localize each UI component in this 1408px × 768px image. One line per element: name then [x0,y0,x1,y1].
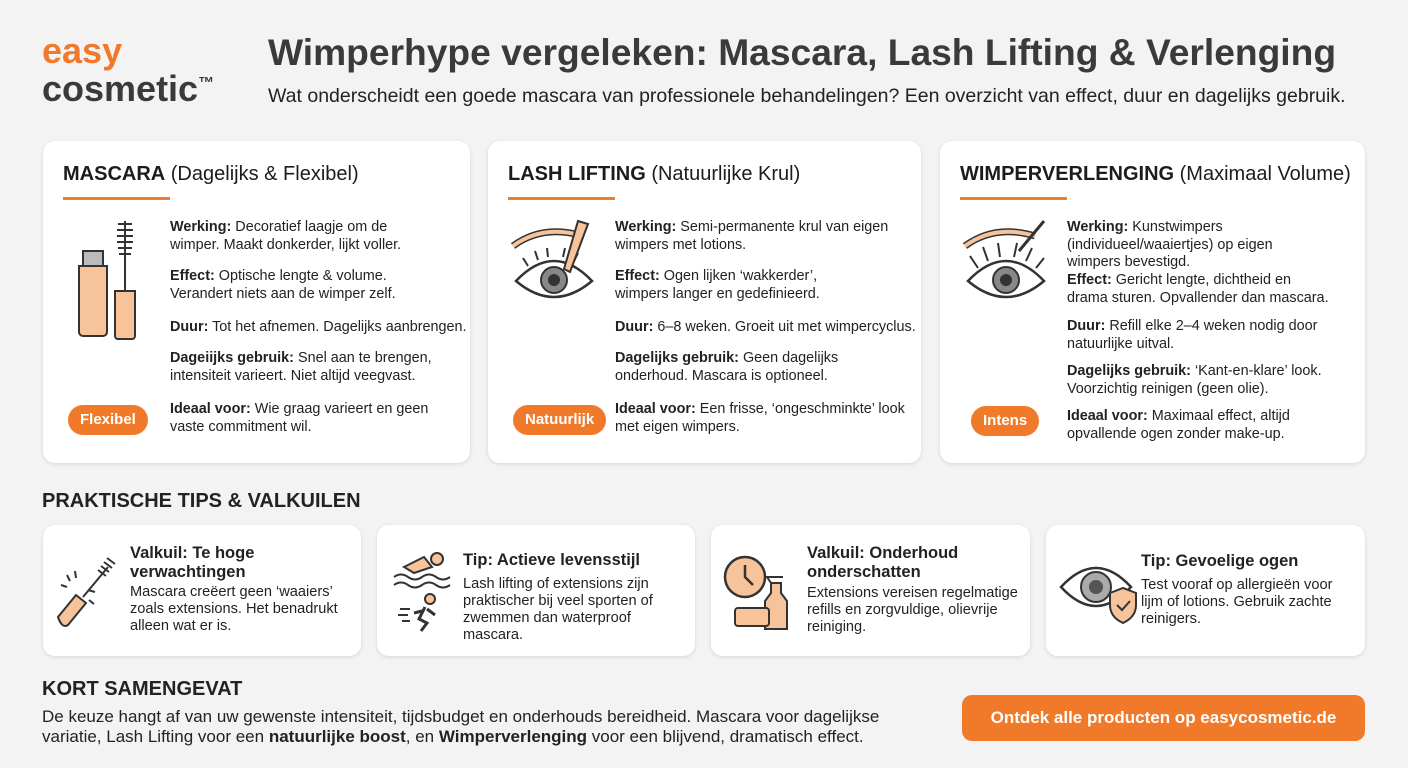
tip card 1 [43,525,361,656]
tip card 3: Extensions vereisen regelmatige [807,585,1018,601]
title: Wimperhype vergeleken: Mascara, Lash Lifting & Verlenging [268,31,1336,73]
tip card 3: onderschatten [807,563,921,581]
text: mascara details: wimper. Maakt donkerder, lijkt voller. [170,236,401,252]
text: verlenging details: Ideaal voor: Maximaal effect, altijd [1067,408,1290,424]
text: mascara details: Effect: Optische lengte & volume. [170,268,387,284]
text: verlenging details: Effect: Gericht lengte, dichtheid en [1067,272,1291,288]
text: lash lifting details: Dagelijks gebruik: Geen dagelijks [615,350,838,366]
icon: eye with shield [1059,566,1137,624]
logo [42,30,214,109]
panel: mascara: MASCARA (Dagelijks & Flexibel) [63,163,359,185]
tip card 3 [711,525,1030,656]
tip card 1: Mascara creëert geen ‘waaiers’ [130,584,333,600]
text: mascara details: Duur: Tot het afnemen. Dagelijks aanbrengen. [170,319,467,335]
text: verlenging details: (individueel/waaiertjes) op eigen [1067,236,1273,252]
tip card 4: Test vooraf op allergieën voor [1141,577,1332,593]
text: lash lifting details: met eigen wimpers. [615,418,740,434]
tip card 3: Valkuil: Onderhoud [807,544,958,562]
summary text: variatie, Lash Lifting voor een natuurlijke boost, en Wimperverlenging voor een blijvend, dramatisch effect. [42,727,864,746]
text: lash lifting details: Duur: 6–8 weken. Groeit uit met wimpercyclus. [615,319,916,335]
badge: Intens [983,412,1027,429]
badge [971,406,1039,436]
text: lash lifting details [615,219,916,434]
text: mascara details: Ideaal voor: Wie graag varieert en geen [170,401,428,417]
logo: easy [42,30,122,71]
text: lash lifting details: wimpers met lotions. [615,236,746,252]
button: cta: Ontdek alle producten op easycosmetic.de [991,708,1336,727]
tip card 3: reiniging. [807,619,866,635]
tip card 3: refills en zorgvuldige, olievrije [807,602,998,618]
heading: summary: KORT SAMENGEVAT [42,678,242,700]
tip card 2: mascara. [463,627,523,643]
panel: lash lifting: LASH LIFTING (Natuurlijke Krul) [508,163,800,185]
text: lash lifting details: Effect: Ogen lijken ‘wakkerder’, [615,268,817,284]
tip card 1: Valkuil: Te hoge [130,544,254,562]
tip card 1: alleen wat er is. [130,618,231,634]
icon: swimmer and runner [394,552,450,632]
badge: Flexibel [80,411,136,428]
summary text [42,707,879,746]
text: verlenging details: Voorzichtig reinigen (geen olie). [1067,380,1269,396]
text: verlenging details: drama sturen. Opvallender dan mascara. [1067,290,1329,306]
button: cta [962,695,1365,741]
text: lash lifting details: onderhoud. Mascara is optioneel. [615,368,828,384]
text: mascara details [170,219,467,434]
badge: Natuurlijk [525,411,594,428]
text: mascara details: vaste commitment wil. [170,418,312,434]
tip card 2: praktischer bij veel sporten of [463,593,653,609]
tip card 4: lijm of lotions. Gebruik zachte [1141,594,1332,610]
text: verlenging details: Werking: Kunstwimpers [1067,219,1223,235]
text: mascara details: Verandert niets aan de wimper zelf. [170,286,396,302]
text: lash lifting details: wimpers langer en gedefinieerd. [615,286,820,302]
tip card 1: verwachtingen [130,563,246,581]
tip card 2: Tip: Actieve levensstijl [463,551,640,569]
icon: eye extensions [963,220,1046,298]
tip card 2: zwemmen dan waterproof [463,610,631,626]
text: mascara details: intensiteit varieert. Niet altijd veegvast. [170,368,416,384]
text: lash lifting details: Werking: Semi-permanente krul van eigen [615,219,888,235]
text: mascara details: Werking: Decoratief laagje om de [170,219,387,235]
panel: lash lifting [488,141,921,463]
logo: cosmetic™ [42,68,214,109]
badge [513,405,606,435]
badge [68,405,148,435]
text: mascara details: Dageiijks gebruik: Snel aan te brengen, [170,350,432,366]
panel: wimperverlenging: WIMPERVERLENGING (Maximaal Volume) [960,163,1351,185]
text: verlenging details: opvallende ogen zonder make-up. [1067,426,1285,442]
panel: mascara [43,141,470,463]
text: verlenging details: wimpers bevestigd. [1067,254,1190,270]
summary text: De keuze hangt af van uw gewenste intensiteit, tijdsbudget en onderhouds bereidheid. Mascara voor dagelijkse [42,707,879,726]
tip card 1: zoals extensions. Het benadrukt [130,601,338,617]
tip card 4 [1046,525,1365,656]
tip card 4: reinigers. [1141,611,1201,627]
icon: clock and spray [724,556,788,630]
subtitle: Wat onderscheidt een goede mascara van professionele behandelingen? Een overzicht van effect, duur en dagelijks gebruik. [268,85,1346,107]
icon: eye lifting [511,220,594,298]
icon: mascara brush [56,557,116,627]
tip card 2 [377,525,695,656]
panel: wimperverlenging [940,141,1365,463]
text: verlenging details: Dagelijks gebruik: ‘Kant-en-klare’ look. [1067,363,1322,379]
icon: mascara [78,221,136,340]
tip card 4: Tip: Gevoelige ogen [1141,552,1298,570]
text: lash lifting details: Ideaal voor: Een frisse, ‘ongeschminkte’ look [615,401,905,417]
text: verlenging details [1067,219,1329,442]
heading: tips: PRAKTISCHE TIPS & VALKUILEN [42,490,361,512]
text: verlenging details: Duur: Refill elke 2–4 weken nodig door [1067,318,1317,334]
tip card 2: Lash lifting of extensions zijn [463,576,649,592]
text: verlenging details: natuurlijke uitval. [1067,336,1174,352]
